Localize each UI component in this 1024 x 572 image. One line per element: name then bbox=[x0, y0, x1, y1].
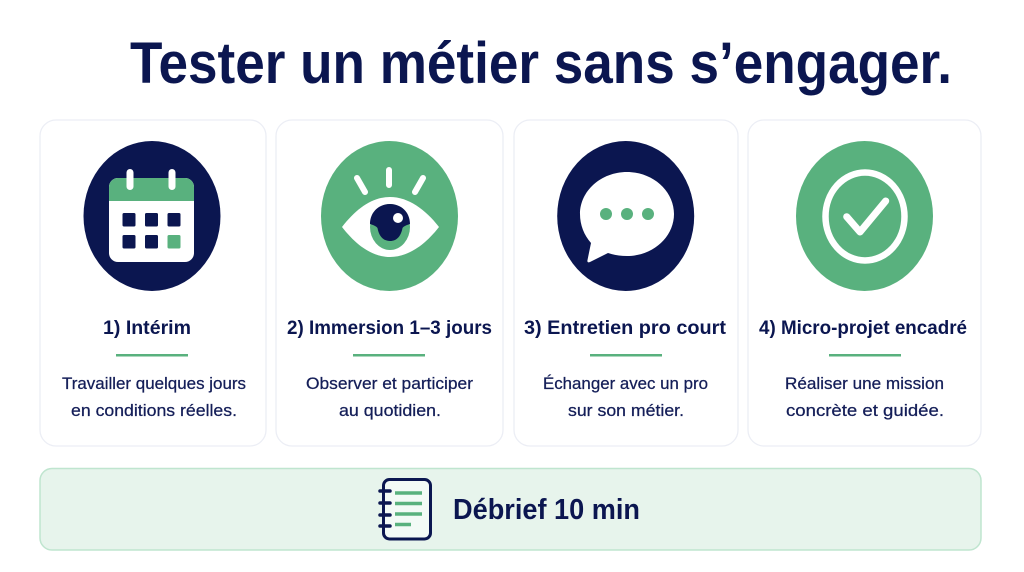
text: micro-projet description bbox=[785, 375, 944, 420]
text: immersion description: au quotidien. bbox=[339, 402, 441, 420]
panel: entretien bbox=[514, 120, 738, 446]
text: intérim description bbox=[62, 375, 246, 420]
panel: immersion bbox=[276, 120, 503, 446]
panel: micro-projet bbox=[748, 120, 981, 446]
text: micro-projet description: Réaliser une mission bbox=[785, 375, 944, 393]
icon: calendar bbox=[84, 141, 220, 291]
icon: speech bubble bbox=[557, 141, 694, 291]
text: entretien description: Échanger avec un pro bbox=[543, 374, 708, 393]
icon: notebook bbox=[380, 480, 430, 539]
icon: check circle bbox=[796, 141, 933, 291]
icon: eye bbox=[321, 141, 458, 291]
panel: intérim bbox=[40, 120, 266, 446]
heading: immersion: 2) Immersion 1–3 jours bbox=[287, 317, 492, 339]
heading: intérim: 1) Intérim bbox=[103, 317, 191, 339]
text: entretien description bbox=[543, 374, 708, 420]
text: intérim description: en conditions réelles. bbox=[71, 402, 237, 420]
text: micro-projet description: concrète et guidée. bbox=[786, 402, 944, 420]
heading: entretien: 3) Entretien pro court bbox=[524, 317, 727, 339]
banner: débrief bbox=[40, 468, 981, 550]
title: Tester un métier sans s’engager. bbox=[130, 31, 952, 96]
text: immersion description: Observer et participer bbox=[306, 375, 474, 393]
heading: micro-projet: 4) Micro-projet encadré bbox=[759, 317, 967, 339]
text: débrief: Débrief 10 min bbox=[453, 494, 640, 526]
text: entretien description: sur son métier. bbox=[568, 402, 684, 420]
text: intérim description: Travailler quelques jours bbox=[62, 375, 246, 393]
text: immersion description bbox=[306, 375, 474, 420]
